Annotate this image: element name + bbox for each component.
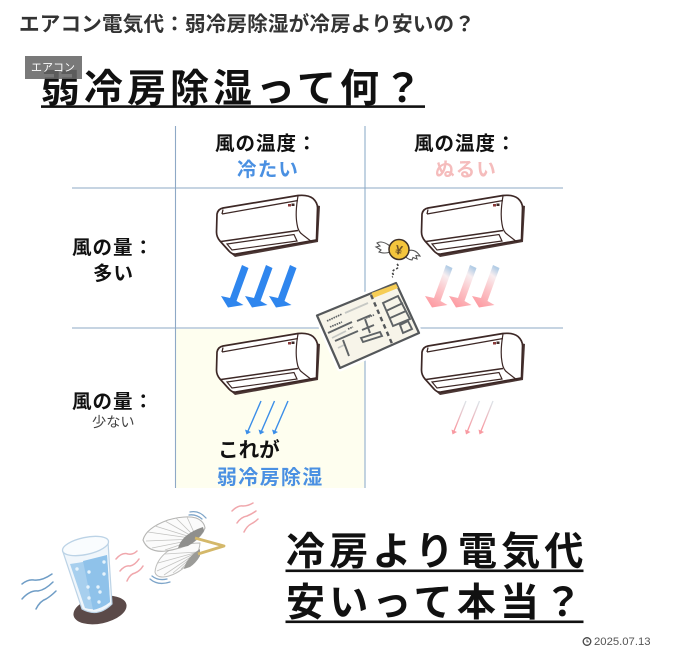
row header: high airflow	[72, 237, 154, 285]
row header: high airflow: 風の量：	[72, 237, 154, 259]
arrows: gentle lukewarm wind	[452, 401, 493, 434]
arrows: strong lukewarm wind	[425, 265, 500, 308]
panel: comparison grid	[72, 126, 563, 489]
row header: low airflow: 少ない	[92, 415, 135, 431]
coaster	[71, 591, 129, 629]
row header: low airflow: 風の量：	[72, 391, 154, 413]
bill text blocks	[328, 315, 382, 356]
icon: warm air waves by the glass	[116, 551, 143, 581]
water	[70, 555, 110, 609]
icon: cool air waves	[22, 574, 56, 609]
publish date: 2025.07.13	[594, 636, 651, 648]
arrows: strong cold wind	[221, 265, 296, 308]
heading: what is weak cooling dehumidification: 弱冷房除湿って何？	[41, 68, 426, 111]
column header: lukewarm air: 風の温度：	[414, 133, 517, 155]
air conditioner: warm low	[422, 333, 525, 395]
air conditioner: cold high	[216, 195, 320, 257]
icon: electricity bill	[317, 283, 419, 368]
motion arcs	[150, 512, 206, 583]
grid lines	[72, 126, 563, 488]
arrows: gentle cold wind	[245, 401, 288, 434]
question text: is it really cheaper than cooling: 冷房より電気代	[286, 531, 588, 574]
stub boxes	[383, 296, 412, 333]
category badge: エアコン	[31, 62, 75, 74]
column header: lukewarm air	[414, 133, 517, 181]
upper fan	[143, 517, 205, 551]
column header: lukewarm air: ぬるい	[435, 159, 497, 181]
question text: is it really cheaper than cooling	[286, 531, 588, 625]
row header: high airflow: 多い	[93, 263, 134, 285]
glass body	[63, 542, 112, 613]
callout: this is weak cooling dehumidification: これが	[218, 438, 280, 462]
page title: エアコン電気代：弱冷房除湿が冷房より安いの？	[19, 12, 475, 36]
highlighted cell	[176, 329, 365, 488]
question text: is it really cheaper than cooling: 安いって本当？	[286, 582, 586, 625]
icon: swinging paper fans	[143, 512, 224, 583]
category badge	[25, 56, 82, 79]
icon: glass of cold water	[61, 533, 129, 629]
callout: this is weak cooling dehumidification: 弱冷房除湿	[217, 466, 324, 489]
callout: this is weak cooling dehumidification	[217, 438, 324, 489]
perforation	[371, 295, 393, 346]
fan handles	[195, 538, 224, 554]
column header: cold air: 風の温度：	[215, 133, 318, 155]
yellow band	[372, 284, 398, 298]
column header: cold air: 冷たい	[237, 159, 299, 181]
icon: flying yen coin	[376, 240, 420, 277]
row header: low airflow	[72, 391, 154, 431]
air conditioner: cold low	[216, 333, 320, 395]
icon: flying yen coin: ¥	[394, 242, 405, 258]
air conditioner: warm high	[422, 195, 525, 257]
lower fan	[155, 543, 200, 577]
icon: warm air waves by the fan	[232, 503, 258, 532]
column header: cold air	[215, 133, 318, 181]
